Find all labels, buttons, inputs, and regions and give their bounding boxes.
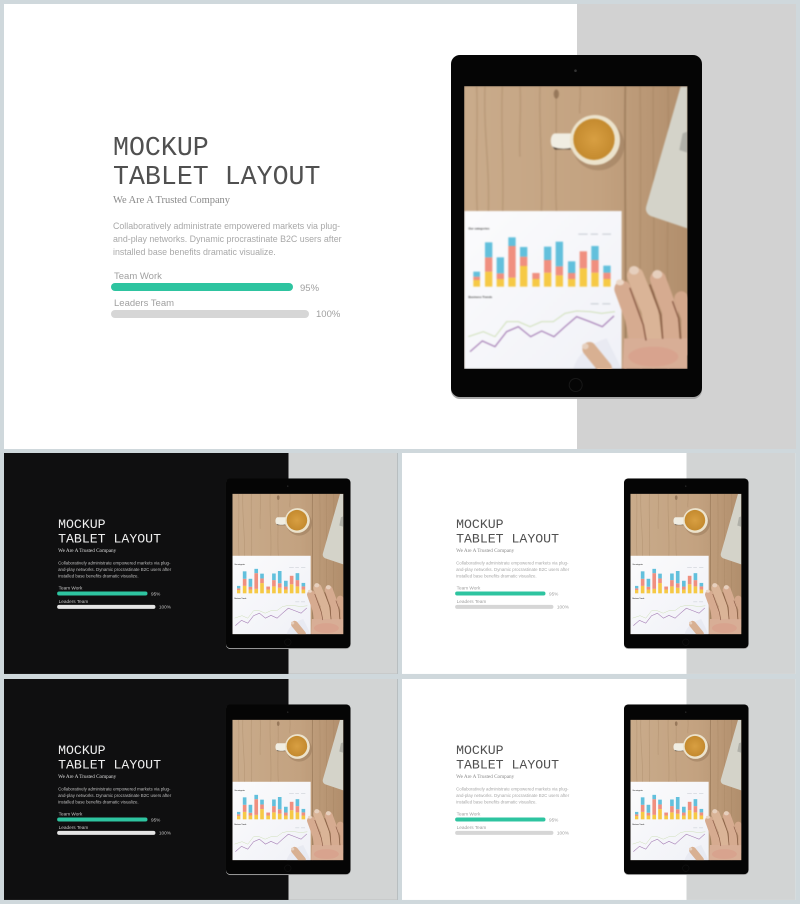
body paragraph: installed base benefits dramatic visualize. — [58, 800, 139, 805]
body paragraph: Collaboratively administrate empowered markets via plug- — [58, 787, 171, 792]
body paragraph: and-play networks. Dynamic procrastinate B2C users after — [58, 567, 172, 572]
body paragraph: and-play networks. Dynamic procrastinate B2C users after — [113, 234, 342, 244]
progress: Leaders Team — [57, 599, 172, 609]
progress: Leaders Team: Leaders Team — [114, 298, 174, 309]
progress: Leaders Team: Leaders Team — [59, 599, 88, 604]
slide background — [4, 679, 397, 900]
progress: Leaders Team — [455, 599, 570, 609]
panel: large light slide — [4, 4, 796, 449]
title: TABLET LAYOUT — [456, 531, 559, 546]
progress: Team Work: Team Work — [59, 586, 83, 591]
panel: small light slide, bottom right — [402, 679, 795, 900]
tablet mockup with photo — [624, 478, 749, 649]
progress: Team Work — [57, 812, 161, 822]
grey side panel — [288, 679, 397, 900]
body paragraph: Collaboratively administrate empowered markets via plug- — [58, 561, 171, 566]
title: TABLET LAYOUT — [113, 162, 320, 192]
progress: Leaders Team — [57, 825, 172, 835]
body paragraph: installed base benefits dramatic visualize. — [456, 800, 537, 805]
body paragraph: installed base benefits dramatic visualize. — [456, 574, 537, 579]
subtitle: We Are A Trusted Company — [113, 195, 231, 206]
slide background — [402, 453, 795, 674]
progress: Team Work — [455, 812, 559, 822]
tablet mockup with photo — [226, 704, 351, 875]
subtitle: We Are A Trusted Company — [456, 548, 515, 554]
progress: Team Work: 95% — [300, 283, 320, 294]
progress: Team Work: Team Work — [114, 271, 162, 282]
panel: small dark slide, bottom left — [4, 679, 397, 900]
title: MOCKUP — [456, 743, 504, 758]
progress: Leaders Team: 100% — [557, 830, 570, 835]
grey side panel — [288, 453, 397, 674]
title: MOCKUP — [58, 517, 106, 532]
progress: Leaders Team: Leaders Team — [59, 825, 88, 830]
progress: Team Work — [111, 271, 320, 294]
tablet mockup with photo — [226, 478, 351, 649]
progress: Team Work: Team Work — [59, 812, 83, 817]
tablet mockup with photo — [624, 704, 749, 875]
text block — [455, 743, 570, 835]
text block — [57, 743, 172, 835]
progress: Team Work: 95% — [151, 817, 161, 822]
progress: Leaders Team: 100% — [159, 830, 172, 835]
body paragraph: installed base benefits dramatic visualize. — [58, 574, 139, 579]
progress: Team Work: Team Work — [457, 586, 481, 591]
body paragraph: Collaboratively administrate empowered markets via plug- — [113, 221, 340, 231]
panel: small dark slide, top left — [4, 453, 397, 674]
grey side panel — [577, 4, 796, 449]
slide background — [402, 679, 795, 900]
body paragraph: and-play networks. Dynamic procrastinate B2C users after — [456, 793, 570, 798]
subtitle: We Are A Trusted Company — [58, 548, 117, 554]
progress: Leaders Team: 100% — [159, 604, 172, 609]
title: TABLET LAYOUT — [58, 757, 161, 772]
slide background — [4, 4, 796, 449]
text block — [455, 517, 570, 609]
subtitle: We Are A Trusted Company — [58, 774, 117, 780]
body paragraph: and-play networks. Dynamic procrastinate B2C users after — [58, 793, 172, 798]
title: TABLET LAYOUT — [58, 531, 161, 546]
text block — [111, 133, 342, 320]
progress: Team Work: 95% — [151, 591, 161, 596]
body paragraph: Collaboratively administrate empowered markets via plug- — [456, 561, 569, 566]
body paragraph: Collaboratively administrate empowered markets via plug- — [456, 787, 569, 792]
progress: Leaders Team: Leaders Team — [457, 599, 486, 604]
title: MOCKUP — [113, 133, 209, 163]
progress: Team Work — [57, 586, 161, 596]
progress: Leaders Team — [455, 825, 570, 835]
progress: Leaders Team — [111, 298, 341, 320]
body paragraph: installed base benefits dramatic visualize. — [113, 247, 276, 257]
body paragraph: and-play networks. Dynamic procrastinate B2C users after — [456, 567, 570, 572]
title: MOCKUP — [456, 517, 504, 532]
progress: Team Work: Team Work — [457, 812, 481, 817]
subtitle: We Are A Trusted Company — [456, 774, 515, 780]
progress: Leaders Team: Leaders Team — [457, 825, 486, 830]
progress: Team Work: 95% — [549, 817, 559, 822]
tablet mockup with photo — [451, 55, 702, 399]
progress: Team Work: 95% — [549, 591, 559, 596]
grey side panel — [686, 679, 795, 900]
progress: Leaders Team: 100% — [557, 604, 570, 609]
panel: small light slide, top right — [402, 453, 795, 674]
grey side panel — [686, 453, 795, 674]
slide background — [4, 453, 397, 674]
text block — [57, 517, 172, 609]
progress: Team Work — [455, 586, 559, 596]
title: MOCKUP — [58, 743, 106, 758]
progress: Leaders Team: 100% — [316, 309, 341, 320]
title: TABLET LAYOUT — [456, 757, 559, 772]
